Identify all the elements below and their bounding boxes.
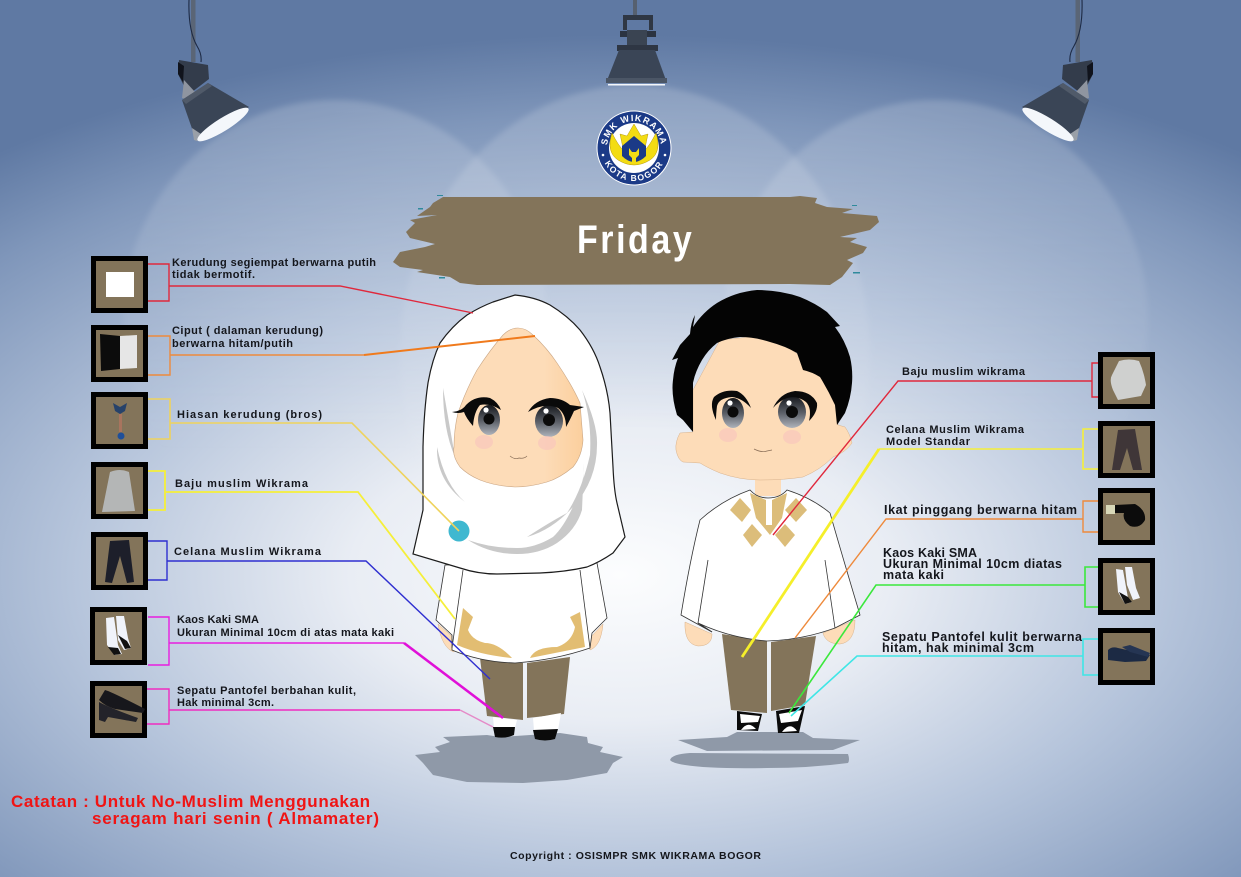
boy face xyxy=(676,335,852,480)
thumbnail: kaos kaki boy xyxy=(1098,558,1155,615)
thumbnail: sepatu boy xyxy=(1098,628,1155,685)
label: kaos kaki boy: mata kaki xyxy=(883,568,944,582)
label: celana girl: Celana Muslim Wikrama xyxy=(174,546,322,558)
label: kaos kaki girl: Ukuran Minimal 10cm di atas mata kaki xyxy=(177,627,394,639)
copyright: Copyright : OSISMPR SMK WIKRAMA BOGOR xyxy=(510,850,761,862)
shadow under girl xyxy=(415,733,623,783)
boy shoes xyxy=(737,706,805,733)
label: celana boy: Celana Muslim Wikrama xyxy=(886,424,1025,436)
thumbnail: ciput xyxy=(91,325,148,382)
girl eyes xyxy=(452,397,584,459)
label: ciput: berwarna hitam/putih xyxy=(172,338,293,350)
boy neck xyxy=(755,470,781,496)
heading banner: Friday xyxy=(393,195,879,285)
label: sepatu boy: Sepatu Pantofel kulit berwarna xyxy=(882,630,1083,644)
heading banner: Friday: Friday xyxy=(577,216,692,262)
connector: bros xyxy=(148,399,459,531)
label: sepatu boy xyxy=(882,630,1083,655)
label: kerudung: Kerudung segiempat berwarna putih xyxy=(172,257,376,269)
connector: kaos kaki boy xyxy=(789,567,1098,713)
note: non-Muslim students xyxy=(11,792,379,828)
icon: left spotlight xyxy=(178,0,252,146)
thumbnail: kaos kaki girl xyxy=(90,607,147,665)
connector: celana boy xyxy=(742,429,1098,657)
label: baju boy: Baju muslim wikrama xyxy=(902,366,1026,378)
label: kaos kaki boy xyxy=(883,546,1062,582)
boy hair xyxy=(672,290,852,432)
thumbnail: celana girl xyxy=(91,532,148,590)
note: non-Muslim students: Catatan : Untuk No-Muslim Menggunakan xyxy=(11,792,370,811)
label: kaos kaki girl xyxy=(177,614,394,639)
label: hiasan kerudung: Hiasan kerudung (bros) xyxy=(177,409,322,421)
connector: baju boy xyxy=(773,363,1106,535)
thumbnail: celana boy xyxy=(1098,421,1155,478)
label: ciput: Ciput ( dalaman kerudung) xyxy=(172,325,323,337)
thumbnail: baju girl xyxy=(91,462,148,519)
icon: centre spotlight xyxy=(606,0,667,86)
logo: SMK Wikrama Kota Bogor xyxy=(596,110,672,186)
label: sepatu girl: Hak minimal 3cm. xyxy=(177,697,274,709)
label: kaos kaki boy: Kaos Kaki SMA xyxy=(883,546,977,560)
girl trousers xyxy=(480,657,570,720)
connector: sepatu boy xyxy=(791,639,1098,716)
connector: kerudung xyxy=(148,264,473,313)
label: sepatu girl: Sepatu Pantofel berbahan kulit, xyxy=(177,685,356,697)
label: kerudung xyxy=(172,257,376,281)
boy eyes xyxy=(712,391,817,452)
character: girl in Friday uniform xyxy=(413,295,625,740)
boy trousers xyxy=(722,634,816,713)
label: sepatu girl xyxy=(177,685,356,709)
boy shirt xyxy=(681,490,860,641)
thumbnail: bros xyxy=(91,392,148,449)
label: ciput xyxy=(172,325,323,350)
note: non-Muslim students: seragam hari senin ( Almamater) xyxy=(92,809,379,828)
boy hands xyxy=(685,620,855,646)
thumbnail: baju boy xyxy=(1098,352,1155,409)
label: kaos kaki girl: Kaos Kaki SMA xyxy=(177,614,259,626)
label: celana boy: Model Standar xyxy=(886,436,971,448)
girl face xyxy=(454,328,583,487)
girl hijab xyxy=(413,295,625,574)
girl shoes xyxy=(493,713,561,740)
connector: kaos kaki girl xyxy=(148,617,503,718)
icon: right spotlight xyxy=(1019,0,1093,146)
brooch xyxy=(448,520,470,542)
thumbnail: sepatu girl xyxy=(90,681,147,738)
hijab folds xyxy=(437,388,597,554)
label: kerudung: tidak bermotif. xyxy=(172,269,255,281)
connector: sepatu girl xyxy=(147,689,493,727)
girl hands xyxy=(438,624,603,652)
logo: SMK Wikrama Kota Bogor: KOTA BOGOR xyxy=(604,160,663,181)
girl tunic xyxy=(436,563,607,663)
label: baju girl: Baju muslim Wikrama xyxy=(175,478,309,490)
label: ikat pinggang: Ikat pinggang berwarna hitam xyxy=(884,503,1077,517)
label: celana boy xyxy=(886,424,1025,448)
character: boy in Friday uniform xyxy=(672,290,860,733)
connector: baju girl xyxy=(146,471,455,619)
thumbnail: kerudung xyxy=(91,256,148,313)
shadow under boy xyxy=(670,732,860,768)
label: sepatu boy: hitam, hak minimal 3cm xyxy=(882,641,1034,655)
label: kaos kaki boy: Ukuran Minimal 10cm diatas xyxy=(883,557,1062,571)
connector: ciput xyxy=(148,336,535,375)
logo: SMK Wikrama Kota Bogor: SMK WIKRAMA xyxy=(601,114,666,145)
thumbnail: ikat pinggang xyxy=(1098,488,1155,545)
connector: celana girl xyxy=(148,541,490,679)
connector: ikat pinggang xyxy=(795,501,1098,638)
